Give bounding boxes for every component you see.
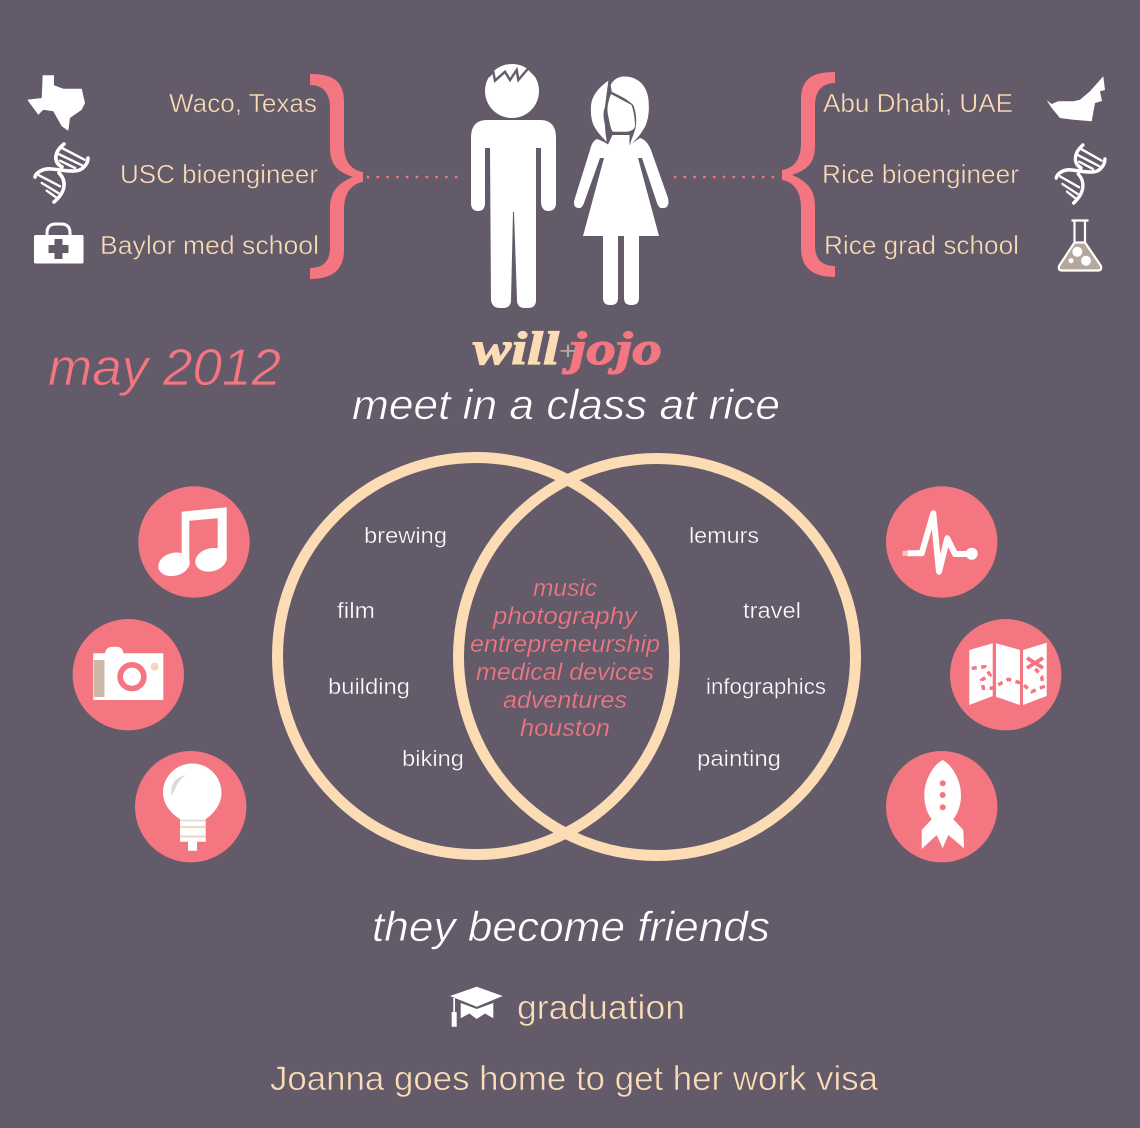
text: Joanna goes home: Joanna goes home to get her work visa xyxy=(270,1060,878,1098)
icon: medical kit xyxy=(34,224,84,264)
heading: they become friends: they become friends xyxy=(372,903,770,950)
heading: meet in a class at rice: meet in a class at rice xyxy=(352,381,780,428)
text: Waco, Texas: Waco, Texas xyxy=(169,88,317,118)
Will interests: building xyxy=(328,674,410,699)
icon: Texas xyxy=(27,75,85,131)
logo: will+jojo: + xyxy=(559,337,577,365)
dotted connector: left xyxy=(368,176,461,178)
Jojo interests: lemurs xyxy=(689,523,759,548)
logo: will+jojo xyxy=(473,323,662,375)
icon: DNA xyxy=(35,144,88,202)
shared interests: music xyxy=(533,575,597,602)
Jojo interests xyxy=(689,523,826,771)
icon: camera xyxy=(73,619,184,730)
shared interests: photography xyxy=(492,603,639,630)
text: Abu Dhabi, UAE: Abu Dhabi, UAE xyxy=(823,88,1013,118)
text: graduation: graduation xyxy=(517,989,685,1027)
icon: DNA xyxy=(1056,145,1105,203)
icon: music xyxy=(138,486,250,598)
shared interests: adventures xyxy=(503,687,627,714)
Jojo interests: painting xyxy=(697,746,781,771)
icon: graduation cap xyxy=(450,987,503,1027)
Will interests xyxy=(328,523,464,771)
text: Baylor med school: Baylor med school xyxy=(100,230,319,260)
shared interests xyxy=(470,575,660,742)
dotted connector: right xyxy=(675,176,778,178)
shared interests: medical devices xyxy=(476,659,654,686)
panel: Will facts xyxy=(27,75,319,264)
Will interests: biking xyxy=(402,746,464,771)
icon: UAE map xyxy=(1047,76,1105,121)
text: Rice grad school: Rice grad school xyxy=(824,230,1019,260)
logo: will+jojo: will xyxy=(473,323,559,375)
venn diagram xyxy=(278,458,856,856)
Jojo interests: travel xyxy=(743,598,801,623)
date: may 2012: may 2012 xyxy=(48,339,281,397)
Will interests: brewing xyxy=(364,523,447,548)
text: Rice bioengineer: Rice bioengineer xyxy=(822,159,1019,189)
brace: left xyxy=(310,74,363,279)
icon: flask xyxy=(1059,220,1101,270)
shared interests: entrepreneurship xyxy=(470,631,660,658)
panel: Jojo facts xyxy=(822,76,1105,270)
icon: heartbeat xyxy=(886,486,997,598)
icon: rocket xyxy=(886,751,997,862)
icon: map xyxy=(950,619,1061,730)
logo: will+jojo: jojo xyxy=(561,323,662,375)
shared interests: houston xyxy=(520,715,610,742)
Will interests: film xyxy=(337,598,375,623)
icon: light bulb xyxy=(135,751,246,862)
figure: Jojo xyxy=(574,76,668,305)
Jojo interests: infographics xyxy=(706,674,826,699)
text: USC bioengineer: USC bioengineer xyxy=(120,159,318,189)
brace: right xyxy=(782,72,835,277)
figure: Will xyxy=(471,64,556,308)
